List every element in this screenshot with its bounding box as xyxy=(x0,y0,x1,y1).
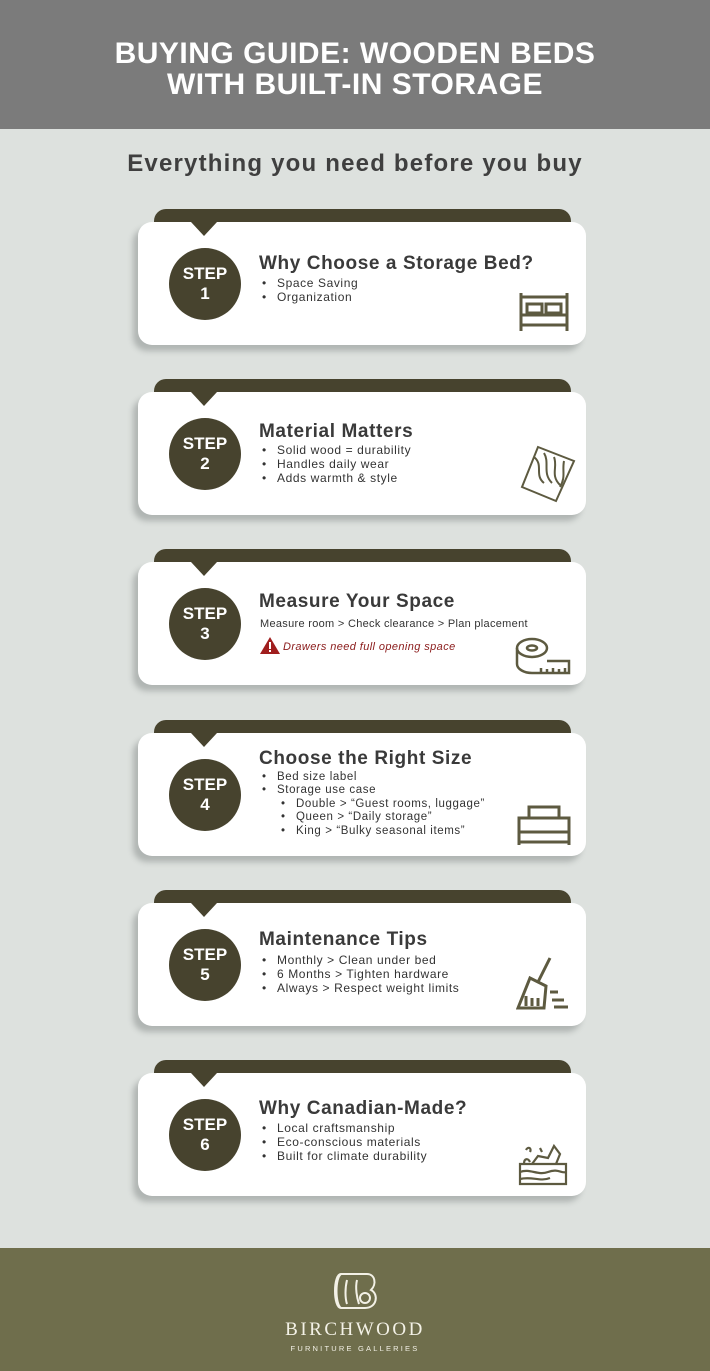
callout: warning xyxy=(260,637,456,654)
step 1 badge xyxy=(169,248,241,320)
icon: log xyxy=(334,1273,377,1309)
panel: step 1 xyxy=(130,209,586,354)
callout: warning: Drawers need full opening space xyxy=(283,641,456,653)
step 4 badge: STEP xyxy=(183,775,227,794)
step 5 bullets: Always > Respect weight limits xyxy=(277,981,459,995)
step 6 badge: 6 xyxy=(200,1135,210,1154)
step 6 bullets: Local craftsmanship xyxy=(277,1121,395,1135)
step 6 bullets: Built for climate durability xyxy=(277,1149,427,1163)
step 2 bullets xyxy=(262,443,411,485)
step 6 badge xyxy=(169,1099,241,1171)
icon: bed frame xyxy=(518,806,570,845)
icon: broom xyxy=(516,957,568,1010)
step 2 heading: Material Matters xyxy=(259,421,413,442)
step 2 bullets: Adds warmth & style xyxy=(277,471,398,485)
title: BUYING GUIDE: WOODEN BEDS xyxy=(115,37,595,70)
step 6 bullets xyxy=(262,1121,427,1163)
step 3 heading: Measure Your Space xyxy=(259,591,455,612)
step 2 bullets: Handles daily wear xyxy=(277,457,389,471)
logo: birchwood: BIRCHWOOD xyxy=(285,1319,425,1340)
step 1 badge: 1 xyxy=(200,284,210,303)
step 1 bullets: Organization xyxy=(277,290,352,304)
step 6 badge: STEP xyxy=(183,1115,227,1134)
step 5 bullets: Monthly > Clean under bed xyxy=(277,953,436,967)
title: WITH BUILT-IN STORAGE xyxy=(167,68,543,101)
panel: step 6 xyxy=(130,1060,586,1204)
step 6 heading: Why Canadian-Made? xyxy=(259,1098,467,1119)
step 4 badge xyxy=(169,759,241,831)
step 5 bullets xyxy=(262,953,459,995)
step 5 heading: Maintenance Tips xyxy=(259,929,428,950)
logo: birchwood xyxy=(285,1273,425,1353)
icon: woodworking plane xyxy=(518,1144,568,1186)
step 1 heading: Why Choose a Storage Bed? xyxy=(259,253,534,274)
step 4 bullets: King > “Bulky seasonal items” xyxy=(296,825,465,837)
subtitle: Everything you need before you buy xyxy=(127,150,583,177)
footer xyxy=(0,1248,710,1371)
step 3 badge: 3 xyxy=(200,624,210,643)
step 4 bullets: Double > “Guest rooms, luggage” xyxy=(296,798,485,810)
step 5 badge: STEP xyxy=(183,945,227,964)
step 4 bullets: Bed size label xyxy=(277,771,357,783)
step 5 badge xyxy=(169,929,241,1001)
step 4 bullets xyxy=(262,771,485,837)
title xyxy=(0,0,710,129)
panel: step 4 xyxy=(130,720,586,864)
step 1 bullets xyxy=(262,276,358,304)
panel: step 2 xyxy=(130,379,586,524)
panel: step 5 xyxy=(130,890,586,1034)
step 4 bullets: Queen > “Daily storage” xyxy=(296,811,432,823)
step 2 badge: STEP xyxy=(183,434,227,453)
step 6 bullets: Eco-conscious materials xyxy=(277,1135,421,1149)
step 2 badge: 2 xyxy=(200,454,210,473)
logo: birchwood: FURNITURE GALLERIES xyxy=(291,1344,419,1353)
step 2 badge xyxy=(169,418,241,490)
step 5 badge: 5 xyxy=(200,965,210,984)
step 4 bullets: Storage use case xyxy=(277,784,376,796)
step 3 badge: STEP xyxy=(183,604,227,623)
step 2 bullets: Solid wood = durability xyxy=(277,443,411,457)
step 3 text: Measure room > Check clearance > Plan placement xyxy=(260,618,528,630)
step 4 badge: 4 xyxy=(200,795,210,814)
step 5 bullets: 6 Months > Tighten hardware xyxy=(277,967,449,981)
step 4 heading: Choose the Right Size xyxy=(259,748,472,769)
icon: tape measure xyxy=(516,638,570,674)
icon: bed xyxy=(520,293,568,331)
panel: step 3 xyxy=(130,549,586,694)
icon: wood plank xyxy=(520,446,576,502)
step 3 badge xyxy=(169,588,241,660)
step 1 bullets: Space Saving xyxy=(277,276,358,290)
step 1 badge: STEP xyxy=(183,264,227,283)
